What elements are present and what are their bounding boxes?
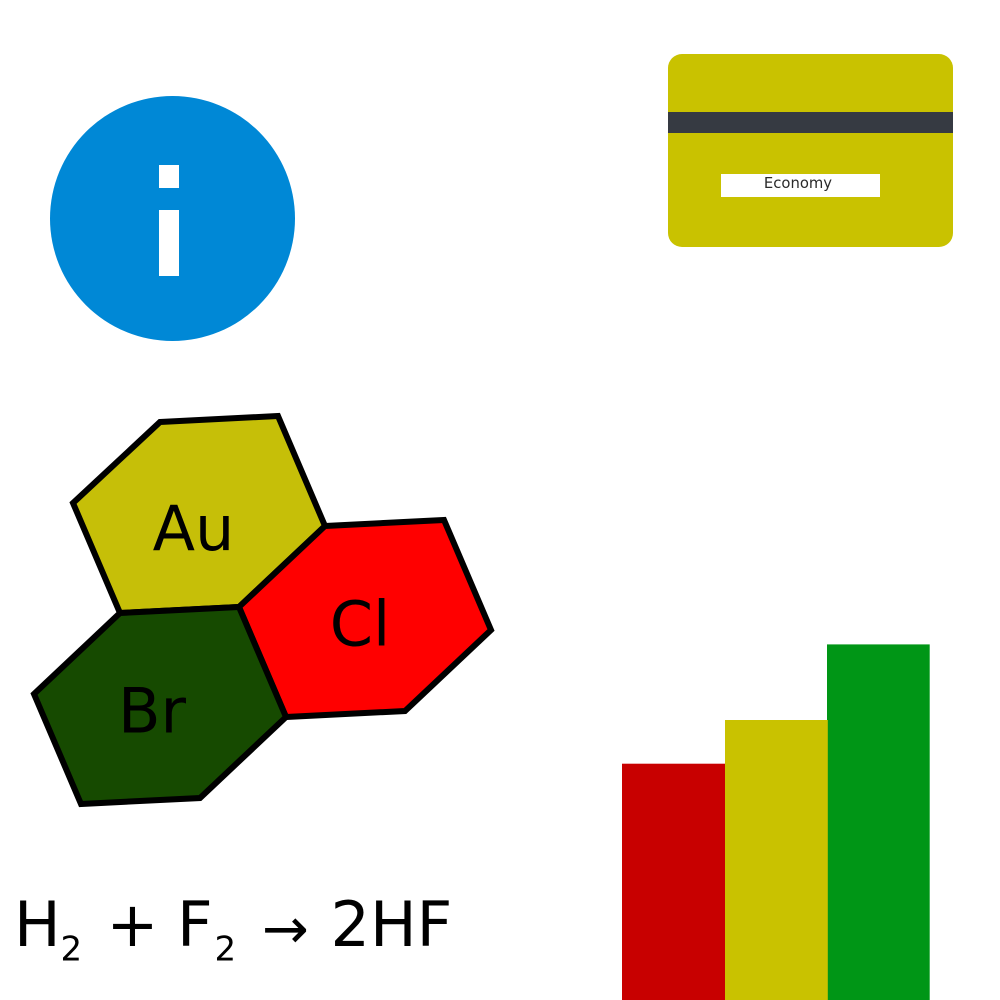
hexagon cluster of elements <box>34 416 491 804</box>
hexagon: Cl <box>239 520 491 717</box>
hexagon: Cl: Cl <box>330 588 390 660</box>
hexagon: Au <box>73 416 325 613</box>
chemical equation: 2 <box>214 930 236 970</box>
icon: info circle <box>50 96 295 341</box>
bar: yellow <box>725 720 828 1000</box>
chemical equation: 2HF <box>330 888 452 961</box>
hexagon: Au: Au <box>153 492 234 565</box>
hexagon: Br: Br <box>118 674 187 748</box>
bar: green <box>827 644 930 1000</box>
chemical equation: H <box>14 888 61 961</box>
icon: credit card labelled Economy <box>668 54 953 247</box>
chemical equation: F <box>177 888 213 961</box>
chemical equation: + <box>106 888 158 961</box>
bar chart <box>622 644 930 1000</box>
chemical equation: → <box>262 897 309 962</box>
chemical equation: 2 <box>60 930 82 970</box>
bar: red <box>622 764 725 1000</box>
icon: credit card labelled Economy: Economy <box>764 175 832 192</box>
hexagon: Br <box>34 607 286 804</box>
